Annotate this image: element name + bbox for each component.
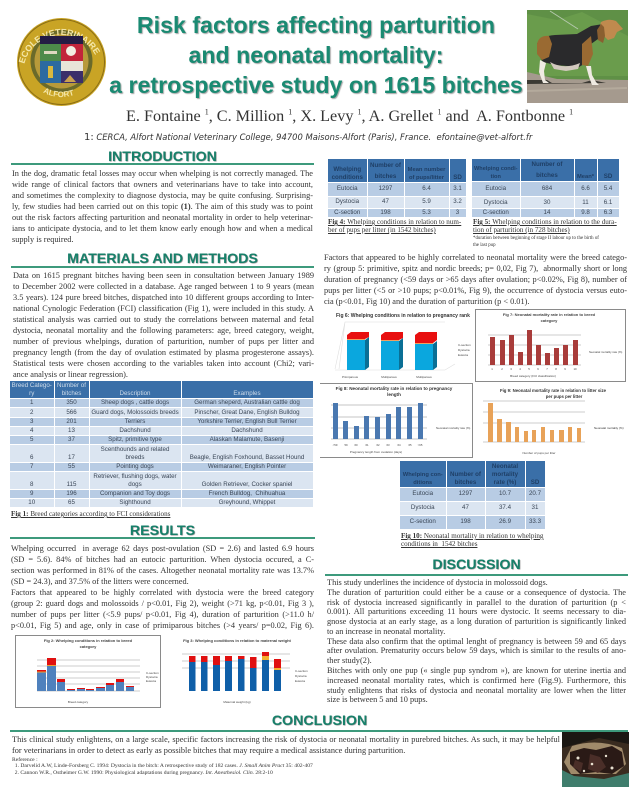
table: breed categories: 55 [68, 463, 75, 470]
chart: fig 6 whelping conditions by pregnancy length: Dystocia [458, 348, 470, 352]
text: materials and methods: dystocia, neonatal mortality and the following parameters: age, breed category, weight, [13, 326, 314, 335]
text: results [11, 544, 314, 630]
text: materials and methods: number of previous whelpings, duration of parturition, number of pups per litter and [13, 337, 314, 346]
text: materials and methods [13, 270, 314, 379]
chart: fig 7 neonatal mortality by breed category: 2 [501, 367, 503, 371]
text: discussion: 0.001). All parturitions exceeding 11 hours were dystocic. It seems necessary to dia- [327, 607, 626, 616]
text: neonatal mortality factors: cia (p<0.01, Fig 10) and the duration of parturition (p < 0.01). [324, 297, 529, 306]
caption: fig 4 [328, 218, 462, 234]
text: materials and methods: 3.5 years). 124 pure breed bitches, dispatched into 10 different groups according to Inter- [13, 293, 314, 302]
table: fig 10 neonatal mortality: bitches [455, 478, 476, 486]
table: breed categories: Guard dogs, Molossoids breeds [91, 408, 179, 416]
table: breed categories: Pinscher, Great Dane, English Bulldog [194, 408, 300, 416]
text: materials and methods: Data on 1615 pregnant bitches having been seen in consultation between January 1989 [13, 270, 314, 280]
table: breed categories: Breed Catego- [12, 382, 52, 389]
text: discussion: size is between 5 and 10 pups. [327, 695, 428, 704]
table: fig 4 pups per litter: 47 [382, 198, 389, 205]
text: conclusion [12, 734, 560, 755]
table: breed categories: bitches [62, 390, 81, 397]
chart: fig 9 neonatal mortality by litter size [483, 388, 624, 455]
table: breed categories: 201 [66, 418, 77, 425]
text: neonatal mortality factors: ry (group 5: primitive, spitz and nordic breeds; p= 0,02, Fig 7), abnormally short or long [324, 264, 627, 273]
table: breed categories: Greyhound, Whippet [219, 499, 275, 506]
table: fig 5 duration of parturition: C-section [483, 209, 509, 216]
title: a retrospective study on 1615 bitches [109, 72, 523, 98]
chart: fig 8 neonatal mortality by pregnancy length [320, 383, 473, 458]
table: breed categories: 350 [66, 399, 77, 406]
text: introduction: In the dog, dramatic fetal losses may occur when whelping is not correctly managed. The [12, 168, 313, 178]
chart: fig 9 neonatal mortality by litter size: Fig 9: Neonatal mortality rate in relation to litter size [500, 388, 607, 393]
table: fig 10 neonatal mortality: Dystocia [411, 504, 435, 511]
table: fig 4 pups per litter: 3 [456, 208, 459, 216]
table: breed categories: Terriers [125, 418, 145, 425]
table: fig 5 duration of parturition: bitches [536, 172, 558, 179]
references: 2. Cannon W.R., Ostheimer G.W. 1990: Physiological adaptations during pregnancy. Int. Anesthesiol. Clin. 28:2-10 [15, 770, 273, 776]
chart: fig 8 neonatal mortality by pregnancy length: 64 [397, 443, 401, 447]
table: fig 5 duration of parturition: Number of [532, 161, 562, 168]
table: fig 10 neonatal mortality: 33.3 [529, 518, 541, 525]
table: fig 5 duration of parturition [472, 159, 619, 217]
chart: fig 8 neonatal mortality by pregnancy length: 59 [344, 443, 348, 447]
table: breed categories: 3 [30, 418, 33, 425]
caption: fig 4: Fig 4: Whelping conditions in relation to num- [328, 218, 461, 226]
text: neonatal mortality factors: Factors that appeared to be highly correlated to neonatal mortality were the breed catego- [324, 252, 627, 262]
heading: introduction: INTRODUCTION [108, 149, 217, 165]
table: breed categories: 1 [30, 399, 33, 406]
text: discussion: risk of dystocia increased significantly in parallel to the duration of parturition (p < [327, 598, 626, 607]
caption: fig 10 [401, 532, 544, 548]
chart: fig 8 neonatal mortality by pregnancy length: 62 [376, 443, 380, 447]
chart: fig 9 neonatal mortality by litter size: Neonatal mortality (%) [594, 426, 624, 430]
table: fig 10 neonatal mortality: ditions [413, 480, 432, 486]
table: fig 4 pups per litter: Whelping [333, 166, 361, 172]
references: Reference : [12, 756, 38, 762]
text: conclusion: This clinical study enlightens, on a large scale, specific factors increasing the risk of dystocia or neonatal mortality in purebred bitches. As such, it may be helpful [12, 734, 560, 744]
table: fig 10 neonatal mortality: mortality [492, 470, 518, 478]
chart: fig 8 neonatal mortality by pregnancy length: 61 [365, 443, 369, 447]
text: results: p<0.01, Fig 5) and age, only in case of primiparous bitches (>4 years/ p=0.02, Fig 6). [11, 620, 314, 630]
text: materials and methods: Statistical tests were chosen according to the variables taken into account (Chi2; vari- [13, 359, 314, 368]
table: breed categories: 17 [68, 454, 75, 461]
table: fig 5 duration of parturition: 30 [544, 198, 550, 206]
caption: fig 5: Fig 5: Whelping conditions in relation to the dura- [473, 218, 617, 226]
table: breed categories: French Bulldog, Chihuahua [209, 490, 285, 497]
chart: fig 7 neonatal mortality by breed category: 6 [537, 367, 539, 371]
text: introduction: and sometimes the complexity to diagnose dystocia, may be quite confusing. Surprising- [12, 191, 313, 200]
table: fig 4 pups per litter: SD [453, 174, 462, 180]
chart: fig 3 whelping conditions by weight: Maternal weight (kg) [223, 700, 251, 704]
table: breed categories: Examples [233, 390, 261, 397]
table: breed categories: 13 [68, 427, 75, 434]
table: breed categories: Weimaraner, English Pointer [208, 463, 286, 470]
table: breed categories: Dachshund [231, 427, 263, 434]
chart: fig 7 neonatal mortality by breed category: 3 [510, 367, 512, 371]
chart: fig 7 neonatal mortality by breed category: 4 [519, 367, 521, 371]
text: materials and methods: ance analysis or linear regression). [13, 370, 128, 379]
table: fig 4 pups per litter: 3.1 [453, 185, 462, 192]
table: breed categories: 115 [67, 481, 76, 488]
chart: fig 2 whelping conditions by breed category [15, 635, 161, 708]
chart: fig 7 neonatal mortality by breed category: Neonatal mortality rate (%) [589, 350, 622, 354]
text: introduction: ly, few studies had been carried out on this topic (1). The aim of this study was to point [12, 202, 313, 211]
chart: fig 7 neonatal mortality by breed category: 5 [528, 367, 530, 371]
table: fig 10 neonatal mortality: Number of [450, 470, 481, 478]
table: fig 5 duration of parturition: 684 [542, 185, 552, 192]
table: fig 4 pups per litter: Eutocia [337, 185, 358, 192]
logo: Ecole Veterinaire Alfort crest [17, 18, 106, 106]
text: discussion: to an increase in neonatal mortality. [327, 627, 445, 636]
text: neonatal mortality factors [324, 252, 627, 306]
table: fig 4 pups per litter: conditions [332, 174, 363, 180]
table: breed categories: 6 [30, 454, 33, 461]
chart: fig 3 whelping conditions by weight [182, 638, 308, 704]
table: fig 10 neonatal mortality: SD [531, 478, 539, 486]
chart: fig 6 whelping conditions by pregnancy length: Fig 6: Whelping conditions in relation to pregnancy rank [336, 313, 470, 319]
text: materials and methods: to December 2002 were collected in a database. Age ranged between 1 to 9 years (mean [13, 282, 314, 291]
table: fig 10 neonatal mortality: 1297 [459, 490, 472, 497]
chart: fig 8 neonatal mortality by pregnancy length: Fig 8: Neonatal mortality rate in relation to pregnancy [336, 386, 453, 391]
table: breed categories: 10 [28, 499, 35, 506]
table: breed categories: Alaskan Malamute, Basenji [210, 436, 284, 443]
chart: fig 3 whelping conditions by weight: Eutocia [295, 679, 305, 683]
table: breed categories: 5 [30, 436, 33, 443]
chart: fig 3 whelping conditions by weight: C-section [295, 669, 308, 673]
chart: fig 2 whelping conditions by breed category: category [80, 644, 97, 649]
chart: fig 7 neonatal mortality by breed category: Breed category (FCI classification) [510, 374, 556, 378]
table: fig 4 pups per litter [328, 159, 466, 217]
table: breed categories: Sheep dogs , cattle dogs [101, 399, 169, 406]
references: 1. Darvelid A.W, Linde-Forsberg C. 1994: Dystocia in the bitch: A retrospective study of 182 cases. J. Small Anim Pract 35: 402-407 [15, 763, 313, 769]
table: breed categories: Scenthounds and related [101, 446, 169, 453]
photo: pregnant beagle [527, 10, 628, 103]
chart: fig 7 neonatal mortality by breed category: 1 [491, 367, 493, 371]
photo: newborn puppies [562, 732, 629, 787]
chart: fig 7 neonatal mortality by breed category: 10 [573, 367, 577, 371]
text: neonatal mortality factors: duration of pregnancy (<59 days or >65 days after ovulation; p<0.02%, Fig 8), number of [324, 275, 627, 284]
table: breed categories: Golden Retriever, Cocker spaniel [202, 481, 292, 488]
table: fig 5 duration of parturition: tion [491, 174, 501, 180]
heading: results: RESULTS [130, 523, 195, 539]
table: breed categories: 4 [30, 427, 33, 434]
table: breed categories [10, 381, 313, 507]
chart: fig 2 whelping conditions by breed category: Breed category [68, 700, 89, 704]
text: introduction: ians to anticipate dystocia, and to let them know early enough how and when a medical [12, 224, 313, 233]
chart: fig 8 neonatal mortality by pregnancy length: >65 [418, 443, 423, 447]
table: fig 4 pups per litter: of pups/litter [409, 174, 444, 180]
table: breed categories: Retriever, flushing dogs, water [93, 473, 177, 480]
authors: E. Fontaine 1, C. Million 1, X. Levy 1, A. Grellet 1 and A. Fontbonne 1 [126, 107, 573, 125]
title: Risk factors affecting parturition [137, 12, 495, 38]
caption: fig 1: Fig 1: Breed categories according to FCI considerations [11, 510, 170, 518]
table: breed categories: Description [120, 390, 150, 397]
table: fig 4 pups per litter: bitches [375, 172, 396, 180]
text: discussion [327, 578, 626, 704]
chart: fig 3 whelping conditions by weight: Dystocia [295, 674, 307, 678]
table: breed categories: dogs [128, 481, 142, 488]
table: breed categories: Pointing dogs [116, 463, 154, 470]
table: fig 10 neonatal mortality: 31 [532, 504, 538, 511]
caption: fig 10: conditions in 1542 bitches [401, 540, 477, 548]
chart: fig 6 whelping conditions by pregnancy length: C-section [458, 343, 471, 347]
table: fig 5 duration of parturition: SD [604, 173, 612, 180]
text: neonatal mortality factors: pups per litter (<5 or >10 pups; p<0.01%, Fig 9), the occurrence of dystocia versus euto- [324, 286, 627, 295]
chart: fig 9 neonatal mortality by litter size: Number of pups per litter [522, 451, 556, 455]
table: breed categories: Yorkshire Terrier, English Bull Terrier [197, 418, 297, 425]
table: fig 10 neonatal mortality: Eutocia [412, 490, 433, 497]
text: discussion: study enlightens that risks of dystocia and neonatal mortality are lower when the litter [327, 686, 626, 695]
table: fig 5 duration of parturition: 11 [582, 198, 589, 206]
text: conclusion: for veterinarians in order to detect as early as possible bitches that may require a medical assistance during parturition. [12, 746, 405, 754]
table: fig 5 duration of parturition: 6.1 [604, 198, 612, 206]
logo: Ecole Veterinaire Alfort crest: ECOLE VETERINAIRE [18, 28, 100, 64]
table: fig 10 neonatal mortality: rate (%) [494, 478, 516, 486]
table: breed categories: 2 [30, 408, 33, 416]
table: fig 10 neonatal mortality: 26.9 [499, 518, 511, 525]
text: results: (SD = 5.6). 84% of bitches had an eutocic parturition. When dystocia occured, a C- [11, 554, 314, 564]
chart: fig 9 neonatal mortality by litter size: per pups per litter [546, 394, 583, 399]
chart: fig 3 whelping conditions by weight: Fig 3: Whelping conditions in relation to maternal weight [183, 638, 292, 643]
chart: fig 2 whelping conditions by breed category: C-section [146, 671, 159, 675]
table: fig 4 pups per litter: Dystocia [335, 198, 359, 205]
text: results: number of pups per litter (<5.9 pups/ p<0.01, Fig 4), duration of parturition (>11.0 h/ [11, 610, 314, 618]
title: and neonatal mortality: [188, 42, 444, 68]
chart: fig 8 neonatal mortality by pregnancy length: Pregnancy length from ovulation (days) [350, 450, 402, 454]
text: discussion: after ovulation. Prematurity occurs below 59 days, which is similar to the results of ano- [327, 646, 626, 655]
table: fig 4 pups per litter: 6.4 [422, 185, 431, 192]
chart: fig 6 whelping conditions by pregnancy length [334, 313, 471, 379]
caption: fig 5: tion of parturition (in 728 bitches) [473, 226, 570, 234]
chart: fig 6 whelping conditions by pregnancy length: Multiparous [381, 375, 397, 379]
heading: conclusion: CONCLUSION [272, 713, 367, 729]
chart: fig 2 whelping conditions by breed category: Dystocia [146, 675, 158, 679]
text: results: (SD = 24.3), and 37.5% of the litters were concerned. [11, 576, 189, 586]
table: fig 10 neonatal mortality: 47 [462, 504, 469, 511]
table: fig 5 duration of parturition: 6.3 [604, 209, 612, 216]
table: fig 4 pups per litter: Number of [370, 162, 401, 168]
table: breed categories: 65 [68, 499, 75, 506]
chart: fig 7 neonatal mortality by breed category [475, 309, 626, 382]
table: fig 5 duration of parturition: Mean* [577, 174, 594, 180]
chart: fig 7 neonatal mortality by breed category: category [541, 318, 558, 323]
text: materials and methods: national Cynologic Federation (FCI) classification (Fig 1), were included in this study. A [13, 304, 314, 313]
table: fig 10 neonatal mortality: 20.7 [529, 490, 541, 497]
caption: fig 5: the last pup [473, 243, 496, 248]
chart: fig 8 neonatal mortality by pregnancy length: length [387, 392, 401, 397]
heading: discussion: DISCUSSION [432, 557, 521, 573]
table: breed categories: 7 [30, 463, 33, 470]
table: fig 4 pups per litter: 198 [380, 208, 391, 216]
table: fig 5 duration of parturition: Dystocia [484, 198, 508, 206]
table: fig 5 duration of parturition: 9.8 [581, 209, 590, 216]
table: breed categories: Sighthound [119, 499, 151, 506]
text: introduction: supply is required. [12, 235, 74, 244]
table: fig 10 neonatal mortality: C-section [410, 518, 436, 525]
table: fig 5 duration of parturition: Whelping condi- [474, 166, 518, 172]
table: breed categories: 37 [68, 436, 75, 443]
caption: fig 5: *duration between beginning of stage II labour up to the birth of [473, 236, 599, 240]
text: materials and methods: pregnancy length (from the day of ovulation estimated by plasma progesterone assays). [13, 348, 314, 357]
logo: Ecole Veterinaire Alfort crest: ALFORT [43, 88, 73, 98]
table: breed categories: ry [29, 390, 34, 397]
chart: fig 7 neonatal mortality by breed category: Fig 7: Neonatal mortality rate in relation to breed [503, 312, 596, 317]
text: discussion: The duration of parturition could either be a cause or a consequence of dystocia. The [327, 588, 626, 597]
table: fig 10 neonatal mortality: Whelping con- [403, 472, 443, 478]
table: fig 4 pups per litter: 1297 [379, 185, 392, 192]
chart: fig 8 neonatal mortality by pregnancy length: <59 [333, 443, 338, 447]
text: introduction: out the risk factors affecting parturition and neonatal mortality in order to help veterinar- [12, 213, 313, 222]
heading: materials and methods: MATERIALS AND METHODS [67, 251, 258, 267]
chart: fig 6 whelping conditions by pregnancy length: Primiparous [342, 375, 358, 379]
text: materials and methods: statistical analysis was carried out to study the correlations between maternal and fetal [13, 315, 314, 324]
table: fig 4 pups per litter: 3.2 [453, 198, 462, 205]
table: breed categories: Dachshund [119, 427, 151, 434]
table: breed categories: 566 [66, 408, 77, 416]
table: fig 10 neonatal mortality: 198 [460, 518, 471, 525]
table: breed categories: Companion and Toy dogs [100, 490, 170, 497]
chart: fig 6 whelping conditions by pregnancy length: Multiparous [416, 375, 432, 379]
table: breed categories: Number of [57, 382, 86, 389]
table: fig 10 neonatal mortality [400, 461, 545, 529]
table: fig 4 pups per litter: Mean number [408, 166, 445, 172]
caption: fig 10: Fig 10: Neonatal mortality in relation to whelping [401, 532, 543, 540]
table: breed categories: Spitz, primitive type [108, 436, 162, 443]
table: breed categories: German sheperd, Australian cattle dog [194, 399, 300, 406]
title [109, 12, 524, 100]
chart: fig 8 neonatal mortality by pregnancy length: 63 [386, 443, 390, 447]
chart: fig 8 neonatal mortality by pregnancy length: 60 [354, 443, 358, 447]
chart: fig 7 neonatal mortality by breed category: 9 [564, 367, 566, 371]
table: fig 10 neonatal mortality: Neonatal [492, 462, 518, 470]
chart: fig 2 whelping conditions by breed category: Eutocia [146, 679, 156, 683]
table: breed categories: 196 [66, 490, 77, 497]
table: fig 4 pups per litter: C-section [334, 208, 360, 216]
table: breed categories: 9 [30, 490, 33, 497]
table: fig 5 duration of parturition: 14 [544, 209, 550, 216]
caption: fig 5 [473, 218, 617, 248]
table: fig 4 pups per litter: 5.3 [422, 208, 431, 216]
table: fig 5 duration of parturition: Eutocia [485, 185, 506, 192]
table: fig 5 duration of parturition: 6.6 [581, 185, 590, 192]
text: introduction: wide range of clinical factors that owners and veterinarians have to take into account, [12, 180, 313, 189]
table: breed categories: breeds [126, 454, 144, 461]
text: discussion: increased neonatal mortality rates, which is confirmed here (Fig.9). Furthermore, this [327, 676, 626, 685]
text: results: section was performed in 81% of the cases. Altogether neonatal mortality rate was 13.7% [11, 566, 314, 574]
text: discussion: gnose dystocia at an early stage, as a long duration of parturition is significantly linked [327, 617, 626, 626]
text: discussion: Bitches with only one pup (« single pup syndrom »), are known for uterine inertia and [327, 666, 626, 675]
chart: fig 2 whelping conditions by breed category: Fig 2: Whelping conditions in relation to breed [44, 638, 133, 643]
table: fig 10 neonatal mortality: 10.7 [499, 490, 511, 497]
table: fig 5 duration of parturition: 5.4 [604, 185, 612, 192]
text: results: Whelping occurred in average 62 days post-ovulation (SD = 2.6) and lasted 6.9 hours [11, 544, 314, 552]
table: breed categories: Beagle, English Foxhound, Basset Hound [190, 454, 304, 461]
table: fig 4 pups per litter: 5.9 [422, 198, 431, 205]
text: results: (group 2: guard dogs and molossoids / p<0.01, Fig 2), weight (>71 kg, p<0.01, Fig 3 ), [11, 598, 314, 608]
table: fig 10 neonatal mortality: 37.4 [499, 504, 511, 511]
text: introduction [12, 168, 313, 244]
chart: fig 6 whelping conditions by pregnancy length: Eutocia [458, 353, 468, 357]
table: breed categories: 8 [30, 481, 33, 488]
chart: fig 8 neonatal mortality by pregnancy length: 65 [408, 443, 412, 447]
chart: fig 8 neonatal mortality by pregnancy length: Neonatal mortality rate (%) [436, 426, 470, 430]
text: results: Factors that appeared to be highly correlated with dystocia were the breed category [11, 588, 314, 596]
caption: fig 4: ber of pups per litter (in 1542 bitches) [328, 226, 436, 234]
chart: fig 7 neonatal mortality by breed category: 8 [555, 367, 557, 371]
text: discussion: ther study(2). [327, 656, 372, 665]
text: discussion: These data also confirm that the optimal lenght of pregnancy is between 59 and 65 days [327, 637, 626, 646]
text: discussion: This study underlines the incidence of dystocia in molossoid dogs. [327, 578, 548, 587]
affiliation: 1: CERCA, Alfort National Veterinary College, 94700 Maisons-Alfort (Paris), France. efontaine@vet-alfort.fr [84, 132, 532, 143]
chart: fig 7 neonatal mortality by breed category: 7 [546, 367, 548, 371]
references [12, 756, 313, 776]
